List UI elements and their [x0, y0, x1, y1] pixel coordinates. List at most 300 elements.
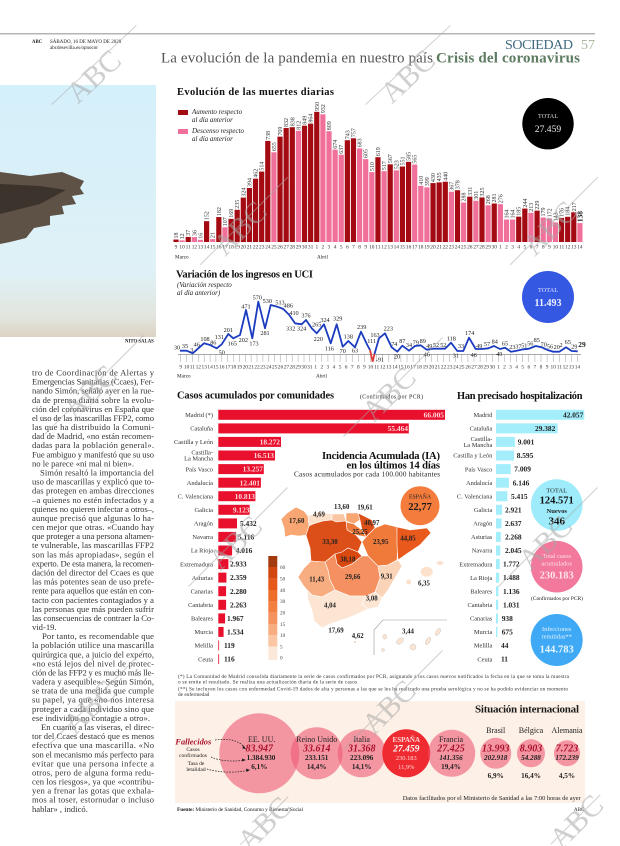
article text: dadas para la población general». — [32, 440, 154, 450]
panel: international situation: 141.356 — [439, 754, 463, 762]
article text: efectiva que una mascarilla. «No — [32, 740, 154, 750]
bar chart: daily deaths: 24 — [265, 244, 271, 250]
panel: cumulative cases by region: Andalucía — [187, 480, 213, 487]
map: Spain incidence: 38,18 — [340, 556, 356, 564]
panel: cumulative cases by region: 10.813 — [235, 492, 255, 501]
line chart: ICU admissions variation: 89 — [420, 338, 426, 345]
bar chart: daily deaths: 674 — [333, 140, 339, 149]
panel: international situation: EE. UU. — [248, 735, 275, 744]
line chart: ICU admissions variation: 239 — [357, 324, 366, 331]
title: La evolución de la pandemia en nuestro país — [161, 50, 433, 66]
article text: las personas que más pueden sufrir — [32, 604, 154, 614]
panel: cumulative cases by region: Baleares — [191, 616, 214, 623]
source: Fuente: Ministerio de Sanidad, Consumo y Bienestar Social — [177, 807, 304, 813]
panel: cumulative cases by region: 4.016 — [236, 546, 253, 555]
bar chart: daily deaths: 217 — [572, 202, 578, 211]
map: Spain incidence: 11,43 — [309, 576, 325, 584]
bar chart: daily deaths: 8 — [542, 244, 545, 250]
bar chart: daily deaths: 164 — [511, 210, 517, 218]
line chart: ICU admissions variation: 12 — [196, 364, 201, 370]
callout: total hospitalised: 124.571 — [540, 496, 574, 506]
note: PCR: (Confirmados por PCR) — [531, 595, 583, 602]
bar chart: daily deaths: 276 — [498, 194, 504, 203]
bar chart: daily deaths: 21 — [437, 244, 442, 250]
panel: cumulative cases by region: 2.933 — [230, 560, 247, 569]
credit: ABC — [574, 808, 585, 813]
bar chart: daily deaths: 28 — [479, 244, 485, 250]
bar chart: daily deaths: 1 — [315, 244, 318, 250]
map: Spain incidence — [281, 504, 447, 655]
line chart: ICU admissions variation: 4 — [333, 364, 336, 370]
bar chart: daily deaths: 164 — [504, 210, 510, 218]
map legend: 40 — [280, 588, 286, 594]
article text: quienes no quieren infectar a otros–, — [32, 504, 154, 514]
panel: cumulative cases by region: Asturias — [192, 575, 214, 582]
article text: se trata de una medida que cumple — [32, 686, 154, 696]
line chart: ICU admissions variation: 13 — [569, 364, 574, 370]
map: Spain incidence: 29,66 — [345, 574, 361, 581]
map legend: 5 — [280, 645, 283, 651]
callout: total cases: 230.183 — [540, 570, 574, 582]
key with dashed arrows — [174, 738, 250, 773]
bar chart: daily deaths: 3 — [511, 244, 514, 250]
article text: Por tanto, es recomendable que — [42, 631, 154, 641]
bar chart: daily deaths: 738 — [266, 131, 272, 140]
bar chart: daily deaths: 26 — [467, 244, 473, 250]
line chart: ICU admissions variation: 22 — [254, 364, 260, 370]
bar chart: daily deaths: 138 — [575, 211, 584, 222]
bar chart: daily deaths: 13 — [571, 244, 577, 250]
photo credit: NITO SALAS — [125, 340, 154, 344]
callout: total hospitalised — [531, 479, 582, 531]
bar chart: daily deaths: 172 — [547, 208, 553, 217]
bar chart: daily deaths: 585 — [407, 152, 413, 161]
line chart: ICU admissions variation: 281 — [260, 330, 270, 337]
panel: hospitalised: 6.146 — [513, 478, 530, 487]
line chart: ICU admissions variation: 3 — [509, 364, 512, 370]
line chart: ICU admissions variation: 2 — [320, 364, 323, 370]
bar chart: daily deaths: 11 — [375, 244, 381, 250]
article text: las consecuencias de contraer la Co- — [32, 613, 154, 623]
key with dashed arrows: Fallecidos — [174, 738, 211, 746]
line chart: ICU admissions variation: 25 — [459, 364, 465, 370]
article text: vid-19. — [32, 622, 57, 632]
bar chart: daily deaths: 2 — [505, 244, 508, 250]
panel: hospitalised: 5.415 — [511, 492, 528, 501]
article text: el uso de las mascarillas FFP2, como — [32, 413, 154, 423]
panel: international situation: 172.239 — [555, 754, 579, 762]
bar chart: daily deaths: 27 — [284, 244, 289, 250]
bar chart: daily deaths: 3 — [328, 244, 331, 250]
key with dashed arrows: Tasa de — [188, 761, 205, 767]
article text: yen a frenar las gotas que exhala- — [32, 786, 154, 796]
map: Spain incidence: 19,61 — [357, 504, 373, 512]
article text: vadera y asequible». Según Simón, — [32, 677, 154, 687]
panel: cumulative cases by region: Galicia — [195, 507, 213, 514]
line chart: ICU admissions variation: 30 — [174, 344, 180, 352]
panel: hospitalised: 11 — [501, 655, 508, 664]
line chart: ICU admissions variation: 165 — [228, 341, 237, 348]
line chart: ICU admissions variation: 20 — [429, 364, 434, 370]
page canvas: ABC — [60, 44, 128, 110]
line chart: ICU admissions variation: 34 — [406, 342, 412, 349]
panel: hospitalised: Cataluña — [470, 426, 492, 433]
bar chart: daily deaths: 8 — [358, 244, 361, 250]
panel: international situation: Alemania — [551, 726, 583, 735]
line chart: ICU admissions variation: 30 — [301, 364, 307, 370]
bar chart: daily deaths: Abril — [317, 254, 329, 260]
panel: hospitalised: Melilla — [474, 643, 492, 650]
panel: hospitalised: Asturias — [471, 534, 493, 541]
footnotes: o se emite el resultado. Se realiza una actualización diaria de la serie de casos — [178, 680, 357, 686]
line chart: ICU admissions variation: 12 — [563, 364, 568, 370]
bar chart: daily deaths: 812 — [296, 121, 302, 130]
line chart: ICU admissions variation: 29 — [571, 344, 577, 351]
line chart: ICU admissions variation: 8 — [357, 364, 360, 370]
line chart: ICU admissions variation: 29 — [484, 364, 489, 370]
line chart: ICU admissions variation: 111 — [367, 338, 376, 345]
line chart: ICU admissions variation: 9 — [546, 364, 549, 370]
line chart: ICU admissions variation: 3 — [327, 364, 330, 370]
bar chart: daily deaths: 27 — [473, 244, 479, 250]
line chart: ICU admissions variation: 28 — [477, 364, 483, 370]
bar chart: daily deaths: 5 — [523, 244, 526, 250]
panel: hospitalised: 42.057 — [563, 410, 584, 419]
map: Spain incidence: 3,08 — [366, 596, 378, 602]
line chart: ICU admissions variation: 27 — [284, 364, 289, 370]
line chart: ICU admissions variation: 201 — [224, 327, 233, 334]
line chart: ICU admissions variation: 9 — [363, 364, 366, 370]
line chart: ICU admissions variation: 22 — [441, 364, 447, 370]
panel: cumulative cases by region: 2.359 — [230, 573, 247, 582]
line chart: ICU admissions variation: 21 — [435, 364, 440, 370]
bar chart: daily deaths: 17 — [412, 244, 418, 250]
panel: hospitalised: Andalucía — [466, 480, 492, 487]
bar chart: daily deaths: 367 — [449, 182, 455, 191]
panel: hospitalised: 1.136 — [503, 587, 520, 596]
panel: international situation: 16,4% — [521, 772, 541, 780]
callout: total hospitalised: 346 — [548, 516, 565, 528]
bar chart: daily deaths: 6 — [530, 244, 533, 250]
bar chart: daily deaths: 176 — [560, 208, 566, 217]
map legend: 0 — [280, 656, 283, 662]
bar chart: daily deaths: 268 — [486, 195, 492, 204]
bar chart: daily deaths: 567 — [388, 154, 394, 163]
article text: otros, pero de alguna forma redu- — [32, 768, 154, 778]
panel: cumulative cases by region: 1.534 — [227, 628, 244, 636]
line chart: ICU admissions variation: 46 — [194, 341, 200, 348]
bar chart: daily deaths: 619 — [376, 147, 382, 156]
bar chart: daily deaths: 25 — [271, 244, 277, 250]
line chart: ICU admissions variation: 14 — [575, 364, 580, 370]
article text: ese individuo no contagie a otro». — [32, 713, 150, 723]
panel: hospitalised: Castilla- — [471, 436, 492, 443]
line chart: ICU admissions variation — [174, 295, 586, 380]
panel: hospitalised: 44 — [501, 641, 509, 650]
bar chart: daily deaths: 229 — [535, 201, 541, 210]
line chart: ICU admissions variation: 570 — [253, 295, 262, 302]
panel: international situation: Bélgica — [519, 726, 544, 735]
bar chart: daily deaths: 331 — [468, 187, 474, 196]
bar chart: daily deaths: 12 — [192, 244, 197, 250]
panel: hospitalised: 2.045 — [505, 546, 522, 555]
callout: Spain incidence — [400, 486, 440, 525]
panel: hospitalised: Extremadura — [459, 561, 492, 568]
bar chart: daily deaths: 20 — [241, 244, 246, 250]
map: Spain incidence: 23,95 — [373, 539, 389, 546]
heading: ICU: Variación de los ingresos en UCI — [176, 270, 313, 280]
callout: total hospitalised: TOTAL — [546, 488, 567, 494]
callout: total cases — [531, 541, 582, 592]
map legend: 15 — [280, 622, 286, 628]
line chart: ICU admissions variation: 19 — [423, 364, 428, 370]
bar chart: daily deaths: 30 — [302, 244, 308, 250]
article text: su papel, ya que «no nos interesa — [32, 695, 154, 705]
article text: dad de Madrid, «no están recomen- — [32, 431, 154, 441]
panel: international situation: 6,9% — [488, 772, 504, 780]
panel: hospitalised: 2.921 — [505, 505, 522, 514]
bar chart: daily deaths: 169 — [229, 209, 235, 218]
bar chart: daily deaths: 637 — [339, 145, 345, 154]
bar chart: daily deaths: 6 — [346, 244, 349, 250]
line chart: ICU admissions variation: 56 — [547, 344, 553, 351]
bar chart: daily deaths: 5 — [340, 244, 343, 250]
heading: incidence: Incidencia Acumulada (IA) — [322, 451, 440, 462]
panel: international situation: Francia — [439, 735, 463, 744]
line chart: ICU admissions variation: 108 — [200, 336, 210, 343]
line chart: ICU admissions variation: 52 — [440, 342, 446, 349]
photo: bird wing against sky — [0, 85, 156, 337]
article text: «no está lejos del nivel de protec- — [32, 658, 154, 668]
panel: cumulative cases by region: Ceuta — [198, 656, 213, 663]
panel: international situation: Datos facilitados por el Ministerio de Sanidad a las 7:00 horas de ayer — [403, 795, 582, 802]
Spain figures: 11,9% — [398, 764, 415, 771]
bar chart: daily deaths: 510 — [370, 162, 376, 171]
panel: cumulative cases by region: Extremadura — [180, 561, 213, 568]
panel: hospitalised: Madrid — [473, 412, 493, 419]
bar chart: daily deaths: 25 — [461, 244, 467, 250]
article text: son el mecanismo más perfecto para — [32, 749, 154, 759]
bar chart: daily deaths: 12 — [381, 244, 387, 250]
line chart: ICU admissions variation: 56 — [527, 340, 533, 347]
bar chart: daily deaths: 4 — [334, 244, 337, 250]
line chart: ICU admissions variation: 23 — [447, 364, 453, 370]
header: SOCIEDAD — [505, 38, 573, 53]
header: 57 — [581, 38, 595, 53]
bar chart: daily deaths: 410 — [419, 176, 425, 185]
line chart: ICU admissions variation: 86 — [210, 339, 216, 346]
line chart: ICU admissions variation: 31 — [453, 352, 459, 359]
key with dashed arrows: Casos — [186, 747, 200, 753]
callout: total ICU: TOTAL — [538, 287, 558, 294]
bar chart: daily deaths: 21 — [211, 232, 217, 238]
panel: international situation: 6,1% — [251, 763, 267, 771]
panel: hospitalised: Baleares — [470, 588, 493, 595]
line chart: ICU admissions variation: 329 — [333, 315, 342, 322]
line chart: ICU admissions variation: 49 — [426, 343, 432, 350]
callout: total deaths: 27.459 — [535, 124, 561, 135]
panel: cumulative cases by region: Castilla- — [191, 450, 213, 456]
panel: hospitalised: Ceuta — [477, 656, 492, 663]
article text: son las más apropiadas», según el — [32, 549, 155, 559]
line chart: ICU admissions variation: 16 — [404, 364, 410, 370]
line chart: ICU admissions variation: 24 — [266, 364, 272, 370]
article text: cen los riesgos», ya que «contribu- — [32, 777, 154, 787]
line chart: ICU admissions variation: 46 — [424, 351, 430, 358]
bar chart: daily deaths: 185 — [517, 207, 523, 216]
line chart: ICU admissions variation: 27 — [471, 364, 477, 370]
panel: international situation: 19,4% — [441, 763, 461, 771]
callout: recovered: remitidas** — [542, 634, 572, 641]
footnotes: (**) Se incluyen los casos con enfermedad Covid-19 dados de alta y personas a las que se les ha realizado una prueba serológica y no se ha podido evidenciar un momento — [178, 686, 568, 692]
panel: hospitalised: Galicia — [474, 507, 492, 514]
panel: cumulative cases by region: Murcia — [195, 629, 213, 636]
map: Spain incidence: 4,69 — [313, 512, 326, 518]
Spain figures — [392, 736, 420, 771]
bar chart: daily deaths: Marzo — [175, 254, 189, 260]
line chart: ICU admissions variation: Abril — [316, 374, 328, 380]
panel: cumulative cases by region: Castilla y León — [174, 439, 214, 446]
legend: daily deaths: Aumento respecto — [191, 108, 243, 116]
bar chart: daily deaths: 17 — [222, 244, 228, 250]
bar chart: daily deaths: 551 — [400, 156, 406, 166]
map legend: 60 — [280, 565, 286, 571]
line chart: ICU admissions variation: 49 — [496, 351, 502, 358]
line chart: ICU admissions variation: Marzo — [177, 374, 191, 380]
line chart: ICU admissions variation: 530 — [263, 298, 272, 305]
bar chart: daily deaths: 31 — [308, 244, 314, 250]
article text: la población utilice una mascarilla — [32, 640, 154, 650]
line chart: ICU admissions variation: 223 — [384, 325, 393, 332]
panel: international situation: 1.384.930 — [247, 754, 276, 762]
article text: experto. De esta manera, la recomen- — [32, 558, 154, 568]
article text: las más potentes sean de uso prefe- — [32, 577, 154, 587]
callout: recovered — [531, 614, 583, 666]
bar chart: daily deaths: 37 — [186, 230, 192, 236]
line chart: ICU admissions variation: 11 — [374, 364, 379, 370]
panel: hospitalised: 938 — [502, 614, 513, 623]
bar chart: daily deaths: 1 — [499, 244, 502, 250]
panel: cumulative cases by region: 9.123 — [233, 505, 250, 514]
page canvas: ABC — [57, 674, 124, 741]
article text: tacto con pacientes contagiados y a — [32, 595, 154, 605]
Spain figures: 27.459 — [392, 744, 420, 754]
panel: hospitalised: 29.382 — [535, 424, 556, 433]
panel: cumulative cases by region: Madrid (*) — [185, 412, 213, 419]
line chart: ICU admissions variation: 118 — [447, 336, 456, 343]
panel: hospitalised: C. Valenciana — [457, 493, 492, 500]
panel: international situation: 233.151 — [305, 754, 329, 762]
bar chart: daily deaths: 757 — [352, 128, 358, 137]
panel: international situation — [174, 701, 585, 803]
line chart: ICU admissions variation: 173 — [249, 340, 259, 347]
panel: international situation: Reino Unido — [296, 735, 337, 744]
line chart: ICU admissions variation: 50 — [219, 349, 225, 356]
article text: hablar» , indicó. — [32, 804, 88, 814]
line chart: ICU admissions variation: 26 — [465, 364, 471, 370]
panel: hospitalised: 675 — [502, 628, 513, 636]
line chart: ICU admissions variation: 10 — [184, 364, 190, 370]
bar chart: daily deaths: 19 — [235, 244, 240, 250]
panel: international situation: 33.614 — [302, 744, 330, 754]
panel: hospitalised: 9.001 — [518, 438, 535, 446]
line chart: ICU admissions variation: 163 — [370, 332, 380, 339]
article text: te vulnerable, las mascarillas FFP2 — [32, 540, 154, 550]
panel: hospitalised: País Vasco — [465, 466, 492, 473]
bar chart: daily deaths: 16 — [198, 233, 204, 239]
bar chart: daily deaths: 849 — [302, 116, 308, 125]
bar chart: daily deaths: 26 — [277, 244, 283, 250]
line chart: ICU admissions variation: 6 — [527, 364, 530, 370]
line chart: ICU admissions variation: 20 — [243, 364, 248, 370]
panel: cumulative cases by region: 16.513 — [254, 451, 274, 460]
line chart: ICU admissions variation: 15 — [398, 364, 404, 370]
title — [161, 50, 580, 66]
bar chart: daily deaths: 107 — [223, 217, 229, 226]
line chart: ICU admissions variation: 29 — [295, 364, 301, 370]
article text: nando Simón, señaló ayer en la rue- — [32, 386, 154, 396]
map: Spain incidence: 40,97 — [364, 520, 380, 527]
line chart: ICU admissions variation: 13 — [202, 364, 207, 370]
panel: hospitalised: Aragón — [473, 521, 493, 528]
line chart: ICU admissions variation: 5 — [339, 364, 342, 370]
article text: Simón resaltó la importancia del — [40, 468, 155, 478]
line chart: ICU admissions variation: 25 — [272, 364, 278, 370]
page canvas: ABC — [356, 674, 423, 741]
key with dashed arrows: letalidad — [186, 767, 206, 773]
bar chart: daily deaths: 11 — [186, 244, 191, 250]
line chart: ICU admissions variation: 4 — [515, 364, 518, 370]
map: Spain incidence: 17,69 — [328, 628, 344, 634]
map legend — [268, 556, 286, 662]
Spain figures: ESPAÑA — [393, 736, 420, 744]
page canvas: ABC — [202, 510, 269, 576]
line chart: ICU admissions variation: 18 — [231, 364, 236, 370]
line chart: ICU admissions variation: 84 — [492, 338, 498, 345]
legend: daily deaths — [178, 108, 245, 143]
bar chart: daily deaths: 10 — [179, 244, 185, 250]
bar chart: daily deaths: 29 — [296, 244, 301, 250]
line chart: ICU admissions variation: 12 — [380, 364, 386, 370]
bar chart: daily deaths: 4 — [517, 244, 520, 250]
bar chart: daily deaths: 9 — [175, 244, 178, 250]
bar chart: daily deaths: 514 — [260, 162, 266, 171]
panel: hospitalised: 7.009 — [514, 465, 531, 474]
bar chart: daily deaths: 16 — [216, 244, 222, 250]
header: abcdesevilla.es/opnocor — [50, 46, 98, 51]
heading: incidence: Casos acumulados por cada 100.000 habitantes — [294, 470, 440, 478]
panel: international situation: Situación internacional — [475, 704, 579, 716]
map legend: 10 — [280, 633, 286, 639]
article text: das protegen en ambas direcciones — [32, 486, 155, 496]
panel: cumulative cases by region: 5.432 — [240, 519, 257, 528]
line chart: ICU admissions variation: 70 — [541, 341, 547, 348]
panel: hospitalised: La Mancha — [463, 442, 492, 449]
line chart: ICU admissions variation: 2 — [503, 364, 506, 370]
line chart: ICU admissions variation: 376 — [301, 313, 311, 320]
panel: cumulative cases by region: C. Valenciana — [178, 493, 213, 500]
line chart: ICU admissions variation: 79 — [413, 339, 419, 346]
line chart: ICU admissions variation: 131 — [215, 334, 224, 341]
map: Spain incidence: 17,60 — [289, 518, 305, 525]
page canvas: ABC — [57, 359, 124, 426]
bar chart: daily deaths: 378 — [456, 180, 462, 189]
bar chart: daily deaths: 11 — [559, 244, 564, 250]
article text — [31, 368, 155, 814]
callout: recovered: 144.783 — [540, 644, 574, 656]
bar chart: daily deaths: 655 — [272, 142, 278, 151]
callout: Spain incidence: ESPAÑA — [409, 492, 432, 500]
